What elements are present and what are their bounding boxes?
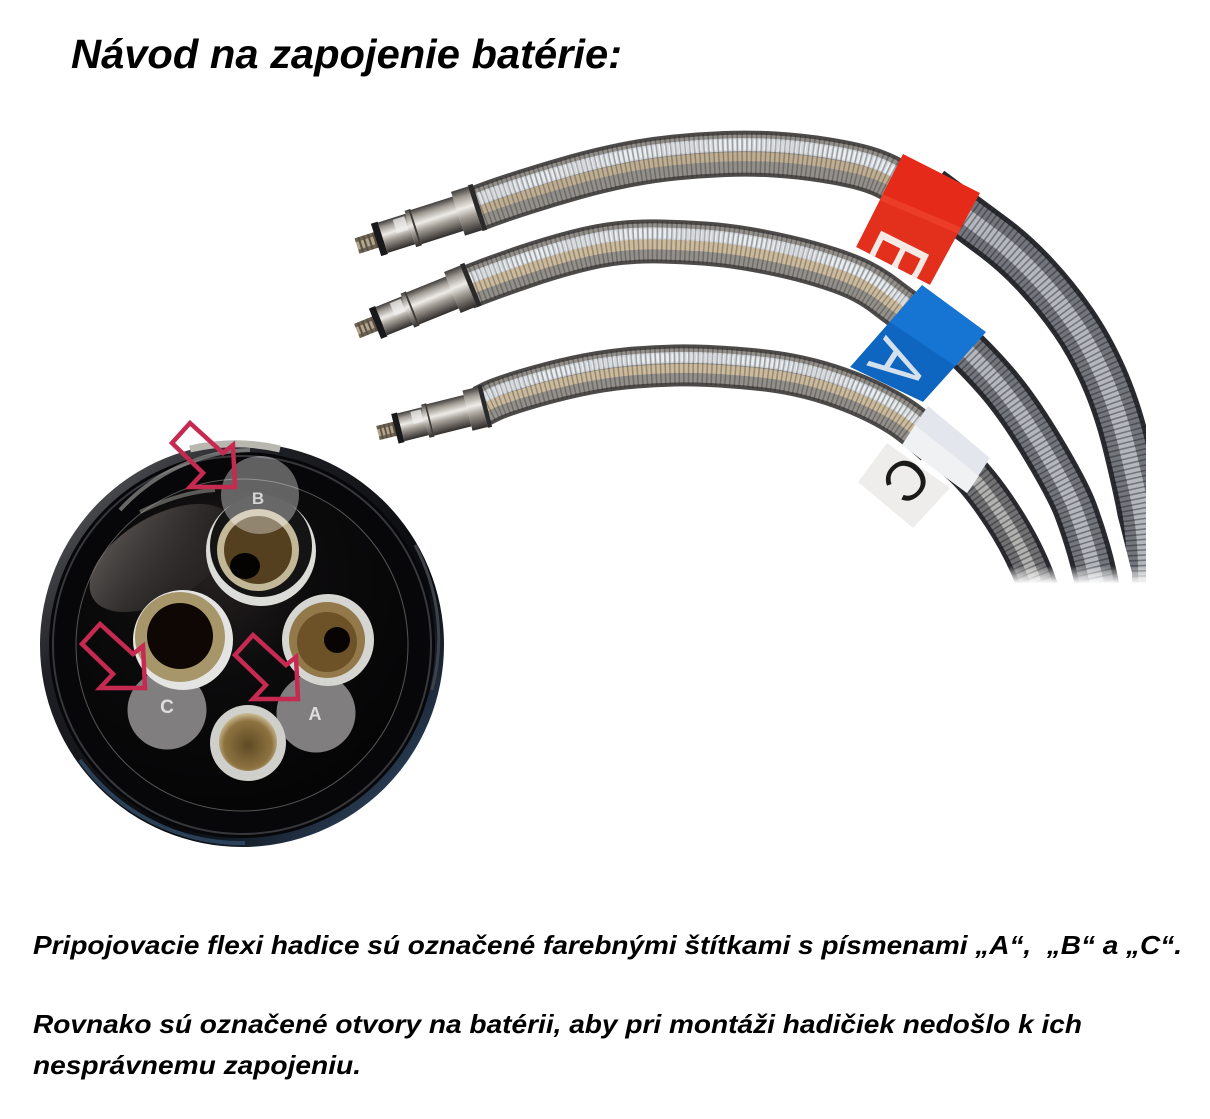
photo: faucet base with outlets	[40, 423, 444, 847]
arrow to B	[172, 423, 235, 487]
outer rim	[40, 443, 444, 847]
connector B	[350, 184, 487, 269]
outlet A	[282, 594, 374, 686]
label circle A: A	[308, 704, 322, 724]
face	[76, 479, 408, 811]
red label B: B	[846, 217, 947, 303]
title: Návod na zapojenie batérie:	[71, 31, 622, 77]
white label C	[858, 406, 990, 528]
photo: flexible hoses	[348, 145, 1186, 616]
label circle C	[128, 670, 206, 750]
label circle A	[276, 674, 356, 752]
instruction text line 1: Pripojovacie flexi hadice sú označené farebnými štítkami s písmenami „A“, „B“ a „C“.	[33, 930, 1182, 960]
bottom fade of hoses	[990, 566, 1170, 616]
label circle B: B	[252, 489, 264, 508]
outlet bottom	[210, 705, 286, 781]
arrow to C	[82, 624, 145, 688]
hose A	[466, 233, 1100, 600]
label circle C: C	[160, 697, 174, 718]
instruction text line 3: nesprávnemu zapojeniu.	[33, 1050, 361, 1080]
blue label A	[850, 285, 986, 403]
instruction text line 2: Rovnako sú označené otvory na batérii, aby pri montáži hadičiek nedošlo k ich	[33, 1009, 1082, 1039]
outlet B	[206, 495, 316, 606]
hose B	[476, 145, 1186, 612]
connector C	[373, 385, 492, 454]
white label C: C	[870, 443, 943, 516]
blue label A: A	[851, 325, 943, 403]
connector A	[348, 263, 482, 352]
arrow to A	[235, 635, 298, 699]
outlet C	[133, 590, 233, 690]
red label B	[856, 154, 980, 285]
label circle B	[221, 456, 299, 534]
hose C	[482, 357, 1042, 600]
